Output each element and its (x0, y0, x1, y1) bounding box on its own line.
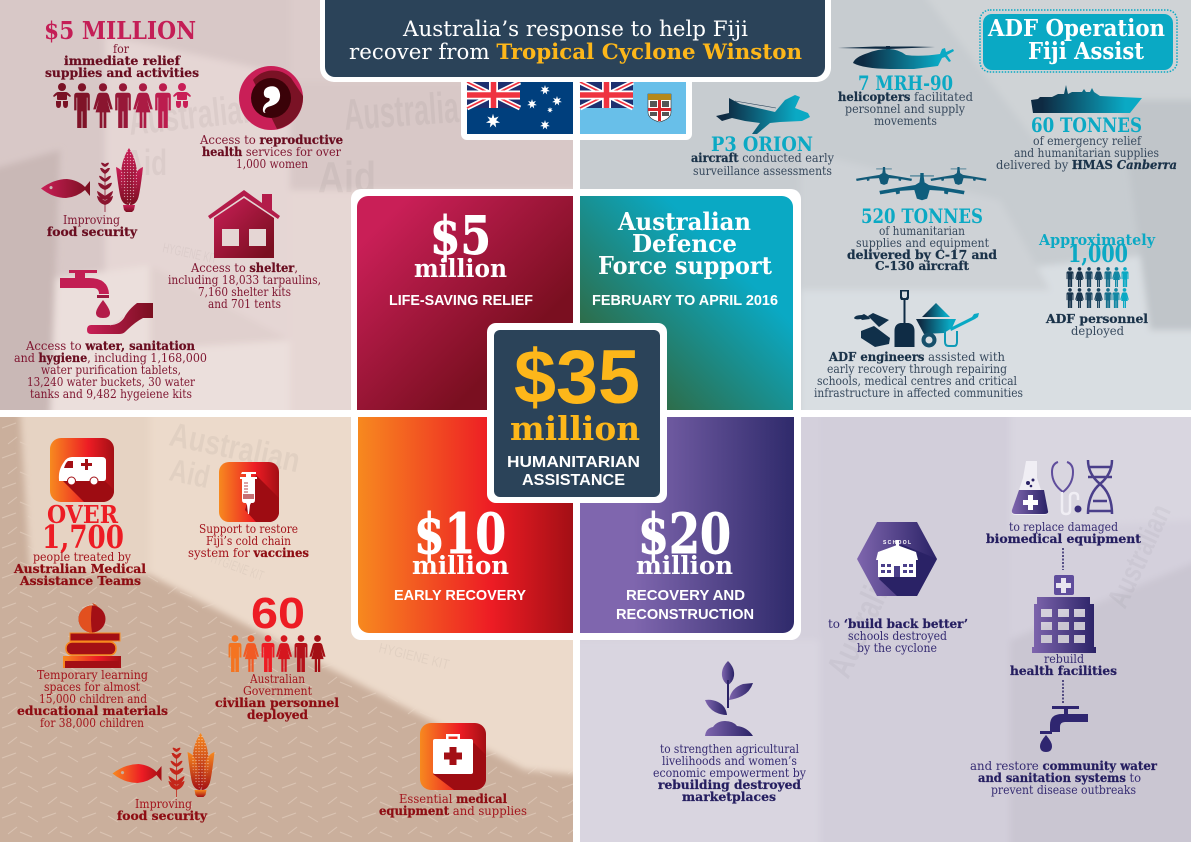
badge: ADF Operation Fiji Assist: Fiji Assist (1028, 38, 1144, 65)
text: 520 tonnes: 520 TONNES (861, 204, 983, 228)
panel: Australian Defence Force support: Australian (617, 207, 751, 236)
icon: engineering tools (854, 290, 979, 347)
panel: Australian Defence Force support: Force support (598, 251, 772, 280)
text: shelter: 7,160 shelter kits (198, 285, 291, 299)
icon: family (53, 83, 191, 128)
background: bottom-left quadrant: Aid (167, 452, 213, 495)
panel: $20 million recovery and reconstruction: $20 (638, 501, 731, 566)
text: community water and sanitation: and sanitation systems to (978, 771, 1141, 785)
text: health facilities: rebuild (1044, 652, 1084, 666)
text: over 1,700 treated: people treated by (33, 550, 131, 564)
panel: $10 million details (13, 438, 527, 823)
text: learning spaces (17, 668, 168, 730)
text: build back better: by the cyclone (857, 641, 937, 655)
text: approximately 1,000: 1,000 (1068, 239, 1128, 268)
text: civilian personnel deployed: civilian personnel (215, 696, 339, 710)
text: ADF engineers: infrastructure in affected communities (814, 386, 1023, 400)
panel: $5 million life-saving relief: LIFE-SAVING RELIEF (389, 292, 533, 309)
text: water, sanitation and hygiene (14, 339, 207, 401)
text: 520 tonnes: delivered by C-17 and (847, 248, 998, 262)
panel: $10 million early recovery (358, 417, 573, 633)
panel: $5 million life-saving relief: million (414, 254, 507, 283)
text: biomedical equipment: biomedical equipment (986, 532, 1141, 546)
text: community water and sanitation: prevent disease outbreaks (991, 783, 1136, 797)
text: food security (117, 797, 208, 823)
text: 7 MRH-90 helicopters: helicopters facilitated (838, 90, 973, 104)
panel: $20 million recovery and reconstruction: million (636, 551, 733, 580)
text: water, sanitation and hygiene: and hygiene, including 1,168,000 (14, 351, 207, 365)
text: medical equipment: equipment and supplies (379, 804, 527, 818)
text: 60 tonnes: 60 TONNES (1031, 113, 1142, 137)
text: water, sanitation and hygiene: Access to water, sanitation (25, 339, 195, 353)
text: over 1,700 treated: Australian Medical (13, 562, 146, 576)
text: ADF personnel deployed: ADF personnel (1045, 312, 1148, 326)
text: water, sanitation and hygiene: 13,240 water buckets, 30 water (27, 375, 195, 389)
text: P3 Orion: aircraft conducted early (691, 151, 834, 165)
text: vaccines (188, 522, 309, 560)
panel: $20 million recovery and reconstruction (580, 417, 794, 633)
text: community water and sanitation: and restore community water (970, 759, 1158, 773)
text: food security: food security (47, 225, 138, 239)
text: ADF personnel deployed: deployed (1071, 324, 1124, 338)
heading: $5 million for immediate relief: immediate relief (64, 54, 181, 68)
icon: house (208, 190, 280, 258)
icon: hospital (1032, 575, 1096, 653)
text: ADF personnel deployed (1045, 312, 1148, 338)
text: community water and sanitation (970, 759, 1158, 797)
text: over 1,700 treated: 1,700 (42, 518, 124, 556)
text: food security: food security (117, 809, 208, 823)
panel: $20 million recovery and reconstruction: RECOVERY AND (626, 587, 745, 604)
text: shelter (168, 261, 321, 311)
central funding panel frame (351, 189, 801, 640)
icon: books and apple (63, 603, 121, 668)
panel: $35 million humanitarian assistance: HUMANITARIAN (507, 454, 640, 471)
heading: $5 million for immediate relief: supplies and activities (45, 66, 199, 80)
text: ADF engineers (814, 350, 1023, 400)
text: food security (47, 213, 138, 239)
text: 520 tonnes: C-130 aircraft (875, 259, 969, 273)
panel: $35 million humanitarian assistance: $35 (514, 335, 640, 420)
text: 60: 60 (251, 589, 305, 638)
panel: $20 million details (653, 460, 1158, 804)
icon: biomedical equipment (1012, 460, 1112, 515)
flag: Australia (467, 80, 573, 134)
flag: Fiji (580, 80, 686, 134)
dotted connector (1062, 680, 1064, 703)
panel: Australian Defence Force support (580, 196, 793, 410)
text: food security: Improving (135, 797, 192, 811)
text: vaccines: system for vaccines (188, 546, 309, 560)
text: health facilities: health facilities (1010, 664, 1117, 678)
text: ADF engineers: ADF engineers assisted with (828, 350, 1005, 364)
text: agricultural livelihoods: rebuilding destroyed (658, 778, 802, 792)
text: reproductive health: Access to reproductive (199, 133, 343, 147)
text: learning spaces: educational materials (17, 704, 168, 718)
text: biomedical equipment: to replace damaged (1009, 520, 1118, 534)
text: shelter: Access to shelter, (190, 261, 298, 275)
icon: water tap and hand (60, 270, 153, 334)
background: top-left quadrant (0, 0, 580, 420)
text: 520 tonnes: supplies and equipment (856, 236, 989, 250)
icon: C-17 and C-130 aircraft (856, 167, 986, 200)
background: bottom-right quadrant (570, 410, 1191, 842)
background: top-left quadrant: Australian (126, 87, 260, 144)
icon: HMAS Canberra ship (1031, 85, 1142, 113)
icon: P3 Orion aircraft (716, 95, 810, 134)
text: 60 tonnes: and humanitarian supplies (1014, 146, 1159, 160)
icon: helicopter (838, 46, 954, 69)
background: bottom-left quadrant (0, 410, 580, 842)
panel: $10 million early recovery: million (412, 551, 509, 580)
text: biomedical equipment (986, 520, 1141, 546)
text: agricultural livelihoods: to strengthen agricultural (660, 742, 799, 756)
panel: $5 million details (14, 16, 343, 401)
badge: ADF Operation Fiji Assist (980, 10, 1177, 72)
text: approximately 1,000 (1038, 231, 1156, 268)
text: 7 MRH-90 helicopters: personnel and supply (845, 102, 965, 116)
text: 7 MRH-90 helicopters: 7 MRH-90 (858, 71, 953, 95)
text: build back better (828, 617, 968, 655)
panel: $35 million humanitarian assistance: million (510, 409, 640, 448)
panel: Australian Defence Force details (691, 10, 1177, 400)
text: reproductive health: 1,000 women (236, 157, 308, 171)
icon: school hexagon: SCHOOL (883, 540, 911, 546)
text: over 1,700 treated (13, 500, 146, 588)
panel: $35 million humanitarian assistance: ASSISTANCE (522, 472, 625, 489)
background: bottom-right quadrant: Australian (1101, 499, 1178, 613)
panel: Australian Defence Force support: Defence (632, 229, 737, 258)
background: bottom-right quadrant: Australian (818, 553, 908, 683)
background: top-left quadrant: Australia (342, 83, 461, 140)
text: build back better: to ‘build back better’ (828, 617, 968, 631)
background: top-left quadrant: Aid (318, 153, 376, 202)
text: vaccines: Fiji’s cold chain (206, 534, 291, 548)
title banner (320, 0, 831, 82)
icon: civilian personnel (229, 635, 326, 672)
text: civilian personnel deployed: deployed (247, 708, 309, 722)
text: ADF engineers: early recovery through repairing (827, 362, 1007, 376)
icon: ADF personnel (1067, 267, 1129, 308)
panel: Australian Defence Force support: FEBRUARY TO APRIL 2016 (592, 292, 778, 309)
text: food security: Improving (63, 213, 120, 227)
text: over 1,700 treated: Assistance Teams (19, 574, 141, 588)
background: top-left quadrant: HYGIENE KIT (161, 239, 219, 266)
text: 60 tonnes: of emergency relief (1033, 134, 1142, 148)
text: civilian personnel deployed: Government (243, 684, 312, 698)
text: shelter: and 701 tents (208, 297, 281, 311)
background: bottom-left quadrant: Australian (166, 416, 303, 480)
text: agricultural livelihoods: economic empowerment by (653, 766, 806, 780)
text: learning spaces: for 38,000 children (40, 716, 144, 730)
text: medical equipment: Essential medical (399, 792, 507, 806)
icon: first aid kit (420, 723, 486, 790)
background: bottom-left quadrant: HYGIENE KIT (377, 639, 451, 672)
text: build back better: schools destroyed (848, 629, 947, 643)
text: agricultural livelihoods (653, 742, 806, 804)
panel: $5 million life-saving relief (357, 196, 573, 410)
text: P3 Orion: P3 ORION (711, 132, 813, 156)
text: P3 Orion (691, 132, 834, 178)
icon: vaccine syringe (219, 462, 279, 522)
text: ADF engineers: schools, medical centres and critical (817, 374, 1017, 388)
panel: $10 million early recovery: $10 (414, 501, 506, 566)
background: bottom-left quadrant: HYGIENE KIT (209, 550, 266, 584)
text: health facilities (1010, 652, 1117, 678)
text: 60 tonnes (996, 113, 1177, 172)
panel: $5 million life-saving relief: $5 (430, 206, 491, 267)
text: 60 tonnes: delivered by HMAS Canberra (996, 158, 1177, 172)
text: learning spaces: 15,000 children and (39, 692, 147, 706)
text: approximately 1,000: Approximately (1038, 231, 1156, 249)
text: vaccines: Support to restore (199, 522, 298, 536)
text: 7 MRH-90 helicopters: movements (874, 114, 937, 128)
text: learning spaces: Temporary learning (37, 668, 148, 682)
text: agricultural livelihoods: livelihoods and women’s (662, 754, 797, 768)
text: water, sanitation and hygiene: water purification tablets, (41, 363, 181, 377)
panel: $35 million humanitarian assistance (487, 323, 667, 503)
icon: school hexagon (857, 522, 937, 596)
text: over 1,700 treated: OVER (47, 500, 119, 529)
text: shelter: including 18,033 tarpaulins, (168, 273, 321, 287)
badge: ADF Operation Fiji Assist: ADF Operation (987, 15, 1165, 42)
text: medical equipment (379, 792, 527, 818)
flags (461, 70, 692, 140)
text: P3 Orion: surveillance assessments (693, 164, 832, 178)
panel: $20 million recovery and reconstruction: RECONSTRUCTION (616, 606, 754, 623)
icon: water tap (1040, 706, 1088, 752)
text: water, sanitation and hygiene: tanks and 9,482 hygeiene kits (30, 387, 192, 401)
icon: food security (41, 148, 143, 212)
icon: plant (705, 661, 753, 736)
dotted connector (1062, 548, 1064, 570)
heading: $5 million for immediate relief (44, 16, 199, 80)
text: 520 tonnes: of humanitarian (879, 224, 965, 238)
icon: food security (112, 733, 214, 797)
title line 2: recover from Tropical Cyclone Winston (349, 39, 802, 64)
heading: $5 million for immediate relief: for (113, 42, 129, 56)
text: reproductive health (199, 133, 343, 171)
text: 7 MRH-90 helicopters (838, 71, 973, 128)
text: civilian personnel deployed: Australian (249, 672, 305, 686)
text: civilian personnel deployed (215, 672, 339, 722)
heading: $5 million for immediate relief: $5 MILLION (44, 16, 196, 45)
panel: $10 million early recovery: EARLY RECOVERY (394, 587, 526, 604)
text: learning spaces: spaces for almost (44, 680, 140, 694)
text: reproductive health: health services for over (202, 145, 341, 159)
background: top-left quadrant: Aid (125, 142, 167, 183)
title line 1: Australia’s response to help Fiji (402, 17, 748, 41)
text: agricultural livelihoods: marketplaces (682, 790, 776, 804)
text: 520 tonnes (847, 204, 998, 273)
background: top-right quadrant (580, 0, 1191, 420)
icon: reproductive health (239, 66, 303, 130)
icon: ambulance (50, 438, 114, 502)
